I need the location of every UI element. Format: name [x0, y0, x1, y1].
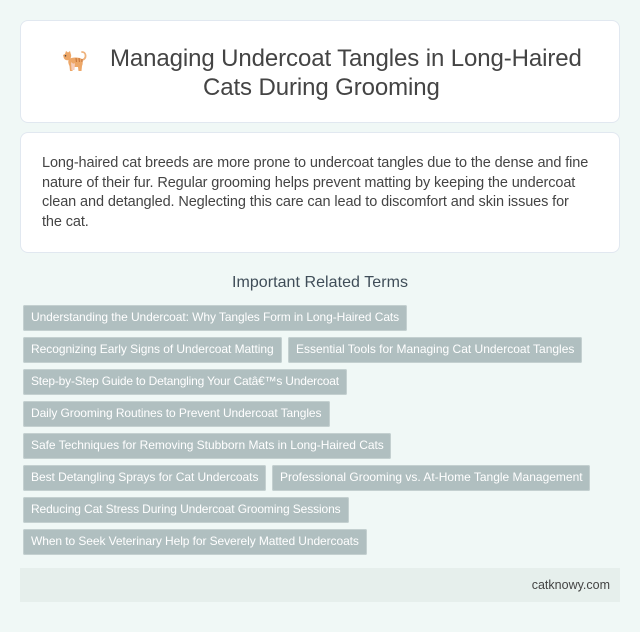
tag: step by step [23, 369, 347, 395]
tag: reducing stress: Reducing Cat Stress During Undercoat Grooming Sessions [31, 502, 341, 516]
panel: title card [20, 20, 620, 123]
tag: veterinary help [23, 529, 367, 555]
tag: step by step: Step-by-Step Guide to Detangling Your Catâ€™s Undercoat [31, 374, 339, 388]
text block: introduction: Long-haired cat breeds are more prone to undercoat tangles due to the dense and fine [42, 155, 588, 171]
text block: introduction [42, 155, 588, 230]
tag: safe techniques: Safe Techniques for Removing Stubborn Mats in Long-Haired Cats [31, 438, 384, 452]
tag: detangling sprays: Best Detangling Sprays for Cat Undercoats [31, 470, 258, 484]
tag: understanding [23, 305, 407, 331]
tag: essential tools [288, 337, 582, 363]
text block: introduction: the cat. [42, 214, 89, 230]
tag: early signs [23, 337, 282, 363]
panel: introduction [20, 132, 620, 253]
tag: veterinary help: When to Seek Veterinary Help for Severely Matted Undercoats [31, 534, 359, 548]
text block: introduction: clean and detangled. Neglecting this care can lead to discomfort and skin issues for [42, 194, 569, 210]
text block: introduction: nature of their fur. Regular grooming helps prevent matting by keeping the undercoat [42, 174, 575, 190]
tag: detangling sprays [23, 465, 266, 491]
footer bar [20, 568, 620, 602]
tag: professional vs home [272, 465, 590, 491]
tag list: related terms [23, 305, 590, 555]
tag: professional vs home: Professional Grooming vs. At-Home Tangle Management [280, 470, 583, 484]
tag: daily routines [23, 401, 330, 427]
tag: reducing stress [23, 497, 349, 523]
tag: understanding: Understanding the Undercoat: Why Tangles Form in Long-Haired Cats [31, 310, 399, 324]
icon: cat [63, 51, 86, 71]
heading: related terms: Important Related Terms [232, 274, 408, 291]
tag: safe techniques [23, 433, 391, 459]
heading: title: Cats During Grooming [203, 74, 440, 101]
footer: site name: catknowy.com [532, 578, 610, 592]
tag: early signs: Recognizing Early Signs of Undercoat Matting [31, 342, 274, 356]
tag: daily routines: Daily Grooming Routines to Prevent Undercoat Tangles [31, 406, 321, 420]
heading: title: Managing Undercoat Tangles in Long-Haired [110, 45, 582, 72]
heading: title [110, 45, 582, 101]
tag: essential tools: Essential Tools for Managing Cat Undercoat Tangles [296, 342, 574, 356]
